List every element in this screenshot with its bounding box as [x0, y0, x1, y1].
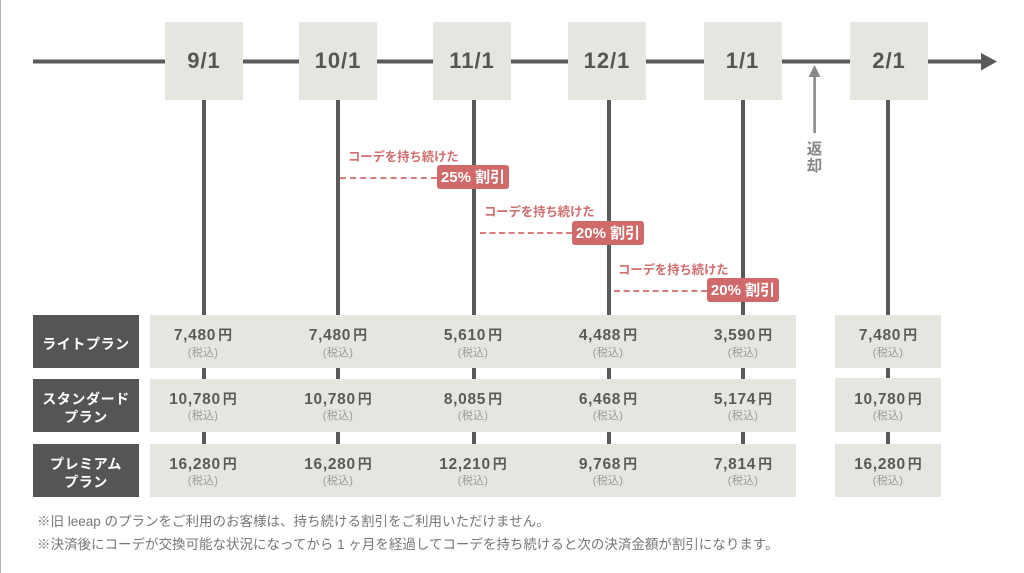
price: standard 1/1	[714, 391, 772, 422]
price band: premium	[150, 444, 796, 497]
badge: 20%	[707, 278, 779, 302]
vertical line: 1/1	[741, 100, 745, 497]
label: standard plan	[33, 379, 139, 432]
return arrow	[808, 65, 820, 133]
price: premium 1/1	[714, 456, 772, 486]
label: light plan: ライトプラン	[42, 336, 130, 352]
price: light 10/1: (税込)	[323, 347, 353, 359]
timeline axis with arrow	[33, 53, 997, 70]
price: light 1/1	[714, 327, 772, 359]
price band: premium, February	[835, 444, 941, 497]
price: standard 2/1: 10,780円	[854, 391, 922, 408]
price: standard 10/1: 10,780円	[304, 391, 372, 408]
date box: 9/1: 9/1	[187, 48, 221, 73]
price: premium 9/1	[169, 456, 237, 486]
price: premium 11/1	[439, 456, 507, 486]
vertical line: 11/1	[472, 100, 476, 497]
price: standard 12/1: (税込)	[593, 410, 623, 422]
date box: 11/1: 11/1	[449, 48, 495, 73]
price: standard 1/1: 5,174円	[714, 391, 772, 408]
price: light 10/1	[309, 327, 367, 359]
label: light plan	[33, 315, 139, 368]
date box: 1/1	[704, 22, 782, 100]
footnote 2: ※決済後にコーデが交換可能な状況になってから 1 ヶ月を経過してコーデを持ち続けると次の決済金額が割引になります。	[37, 537, 779, 552]
price band: light	[150, 315, 796, 368]
discount callout: 20% first	[480, 204, 644, 245]
price: standard 12/1	[579, 391, 637, 422]
callout caption: コーデを持ち続けた	[618, 263, 729, 277]
price: premium 12/1	[579, 456, 637, 486]
price: light 1/1: (税込)	[728, 347, 758, 359]
label: standard plan: プラン	[64, 409, 108, 425]
label: premium plan	[33, 444, 139, 497]
date box: 12/1	[568, 22, 646, 100]
return label	[807, 141, 822, 174]
price: premium 10/1	[304, 456, 372, 486]
price: light 11/1: 5,610円	[444, 327, 502, 344]
price: standard 2/1	[854, 391, 922, 422]
price: light 11/1: (税込)	[458, 347, 488, 359]
price: premium 1/1: 7,814円	[714, 456, 772, 472]
callout caption: コーデを持ち続けた	[484, 205, 595, 219]
price: light 1/1: 3,590円	[714, 327, 772, 344]
vertical line: 12/1	[606, 100, 610, 497]
price: premium 12/1: (税込)	[593, 474, 623, 486]
price: light 12/1	[579, 327, 637, 359]
badge: 20%: 20% 割引	[576, 225, 640, 242]
date box: 2/1: 2/1	[872, 48, 906, 73]
callout leader	[614, 290, 707, 292]
date box: 9/1	[165, 22, 243, 100]
date box: 12/1: 12/1	[584, 48, 630, 73]
date box: 1/1: 1/1	[726, 48, 759, 73]
footnote 1: ※旧 leeap のプランをご利用のお客様は、持ち続ける割引をご利用いただけません。	[37, 514, 550, 529]
date box: 10/1	[299, 22, 377, 100]
price: light 2/1	[859, 327, 917, 359]
left edge stripe	[0, 0, 1, 573]
price: light 12/1: (税込)	[593, 347, 623, 359]
price: premium 11/1: (税込)	[458, 474, 488, 486]
price: standard 11/1: 8,085円	[444, 391, 502, 408]
date box: 2/1	[850, 22, 928, 100]
callout leader	[480, 232, 572, 234]
price: premium 9/1: 16,280円	[169, 456, 237, 472]
price: light 2/1: (税込)	[873, 347, 903, 359]
price: standard 2/1: (税込)	[873, 410, 903, 422]
price band: standard, February	[835, 378, 941, 432]
price: standard 10/1: (税込)	[323, 410, 353, 422]
label: premium plan: プレミアム	[50, 456, 122, 472]
callout caption: コーデを持ち続けた	[348, 150, 459, 164]
price: standard 11/1	[444, 391, 502, 422]
vertical line: 9/1	[202, 100, 206, 497]
date box: 11/1	[433, 22, 511, 100]
price: premium 10/1: (税込)	[323, 474, 353, 486]
badge: 20%: 20% 割引	[711, 282, 775, 299]
badge: 20%	[572, 221, 644, 245]
price: light 2/1: 7,480円	[859, 327, 917, 344]
price: premium 2/1: 16,280円	[854, 456, 922, 472]
date box: 10/1: 10/1	[315, 48, 361, 73]
price: standard 9/1: 10,780円	[169, 391, 237, 408]
badge: 25%: 25% 割引	[441, 169, 505, 186]
price: light 9/1	[174, 327, 232, 359]
price: premium 2/1	[854, 456, 922, 486]
price: light 11/1	[444, 327, 502, 359]
price band: light, February	[835, 315, 941, 368]
price: standard 9/1	[169, 391, 237, 422]
label: standard plan: スタンダード	[42, 390, 130, 406]
discount callout: 25%	[340, 150, 509, 189]
vertical line: 2/1	[886, 100, 890, 497]
discount callout: 20% second	[614, 262, 779, 302]
vertical line: 10/1	[336, 100, 340, 497]
price: premium 9/1: (税込)	[188, 474, 218, 486]
price: light 12/1: 4,488円	[579, 327, 637, 344]
price: premium 2/1: (税込)	[873, 474, 903, 486]
return label: 却	[807, 158, 822, 174]
label: premium plan: プラン	[64, 474, 108, 490]
callout leader	[340, 177, 437, 179]
price band: standard	[150, 379, 796, 432]
return label: 返	[807, 141, 822, 158]
price: premium 1/1: (税込)	[728, 474, 758, 486]
price: premium 10/1: 16,280円	[304, 456, 372, 472]
price: light 9/1: (税込)	[188, 347, 218, 359]
price: premium 12/1: 9,768円	[579, 456, 637, 472]
price: premium 11/1: 12,210円	[439, 456, 507, 472]
price: standard 9/1: (税込)	[188, 410, 218, 422]
price: light 9/1: 7,480円	[174, 327, 232, 344]
price: standard 11/1: (税込)	[458, 410, 488, 422]
price: standard 12/1: 6,468円	[579, 391, 637, 408]
price: light 10/1: 7,480円	[309, 327, 367, 344]
badge: 25%	[437, 165, 509, 189]
price: standard 10/1	[304, 391, 372, 422]
price: standard 1/1: (税込)	[728, 410, 758, 422]
